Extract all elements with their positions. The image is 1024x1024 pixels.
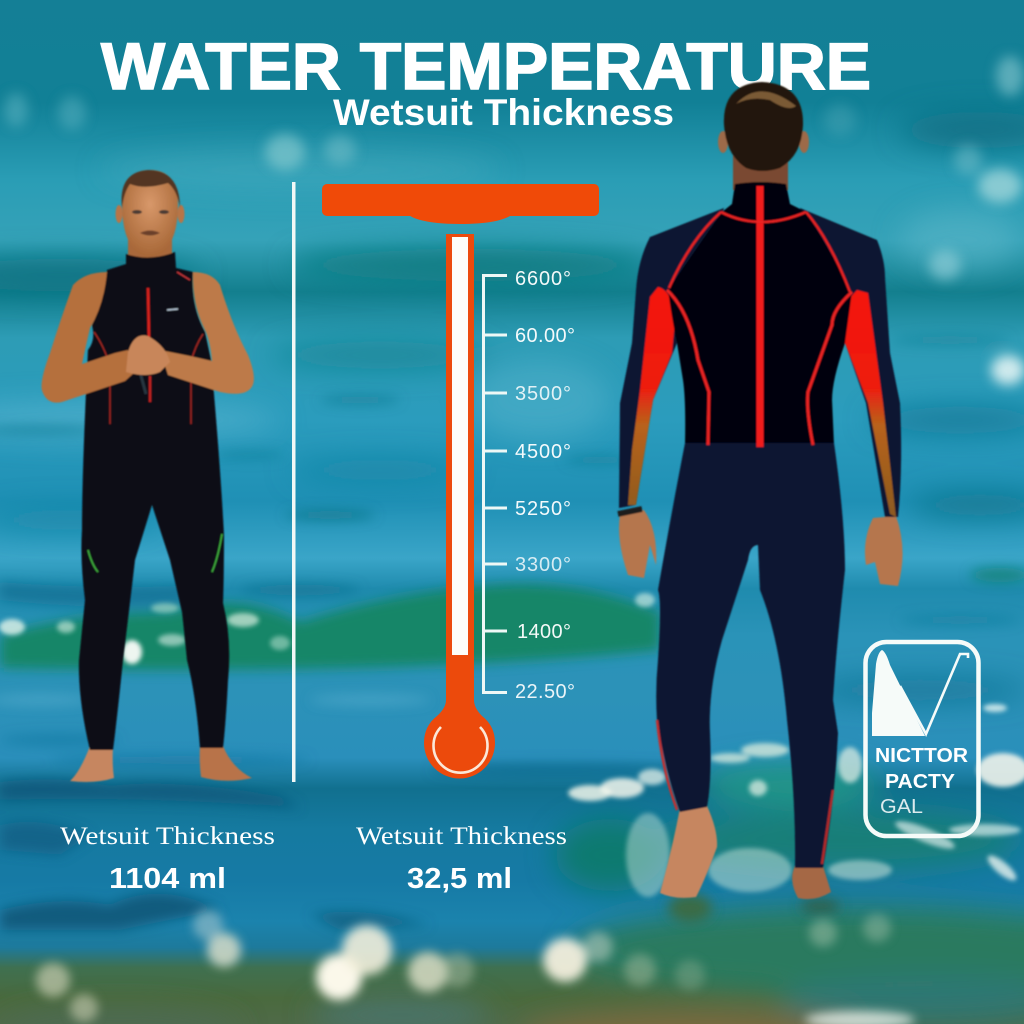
- torso: [668, 182, 852, 445]
- value: left: 1104 ml: [109, 863, 226, 895]
- figure: man in long-sleeve wetsuit, back view: [618, 82, 903, 899]
- neck: [128, 235, 172, 262]
- hair: [724, 82, 803, 171]
- red seams: [148, 288, 149, 338]
- watch: [618, 509, 642, 514]
- left sleeve: [619, 208, 724, 508]
- feet: [660, 806, 717, 898]
- mercury column white: [452, 237, 468, 655]
- left red arm panel: [628, 287, 675, 505]
- caption: right wetsuit thickness: Wetsuit Thickness: [356, 823, 567, 850]
- clasped hands: [126, 335, 170, 375]
- thermometer tube and bulb: [424, 234, 495, 778]
- bokeh spots: [36, 910, 915, 1024]
- lower wave right: [555, 819, 665, 891]
- wave humps: [0, 584, 660, 670]
- bulb highlight: [434, 727, 488, 773]
- thermometer: [322, 184, 599, 778]
- caption: left wetsuit thickness: Wetsuit Thickness: [60, 823, 275, 850]
- right red arm panel: [845, 290, 896, 517]
- red seams back: [756, 186, 764, 447]
- temperature scale: 3300°: [515, 554, 571, 576]
- temperature scale: 1400°: [517, 621, 571, 643]
- logo badge: PACTY: [885, 770, 955, 793]
- temperature scale: 6600°: [515, 268, 571, 290]
- logo text: NICTTOR: [875, 744, 968, 767]
- wetsuit body: [79, 252, 229, 750]
- value: right: 32,5 ml: [407, 863, 512, 895]
- temperature scale: 4500°: [515, 441, 571, 463]
- logo badge: GAL: [880, 795, 923, 818]
- logo badge: [866, 642, 978, 836]
- feet: [70, 746, 114, 782]
- subtitle: Wetsuit Thickness: [333, 92, 674, 133]
- temperature scale: 60.00°: [515, 325, 575, 347]
- figure: man in sleeveless wetsuit, front view: [42, 170, 254, 782]
- left arm: [42, 272, 135, 403]
- right sleeve: [800, 208, 901, 517]
- legs: [656, 443, 845, 868]
- thermometer top bar: [322, 184, 599, 216]
- right arm: [160, 272, 254, 394]
- soft light spots: [4, 93, 28, 127]
- face: [122, 170, 178, 256]
- title: WATER TEMPERATURE: [101, 29, 871, 103]
- temperature scale: 5250°: [515, 498, 571, 520]
- hands: [619, 510, 656, 578]
- temperature scale: 3500°: [515, 383, 571, 405]
- logo sail icon: [872, 650, 925, 736]
- foam: [0, 593, 1024, 897]
- divider line: [292, 182, 296, 782]
- temperature scale: [483, 268, 575, 703]
- temperature scale: 22.50°: [515, 681, 575, 703]
- neck and ears: [733, 150, 788, 190]
- hair: [122, 170, 180, 208]
